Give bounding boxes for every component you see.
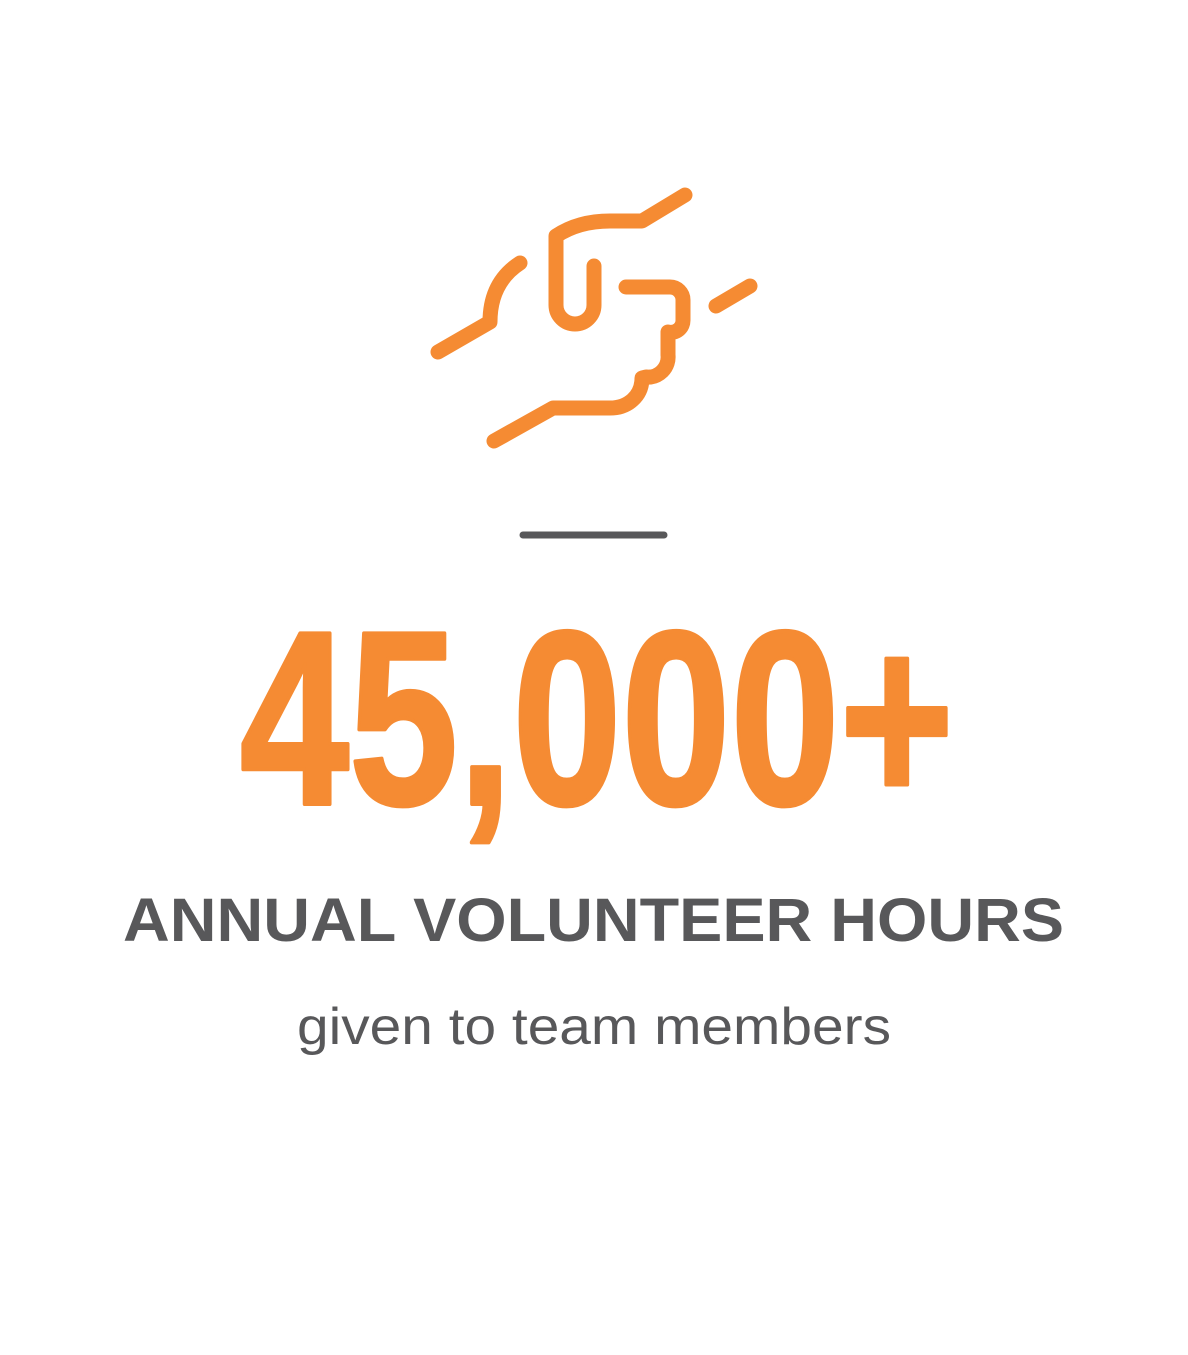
subtext: given to team members xyxy=(297,998,891,1056)
big number: 45,000+ xyxy=(240,579,954,857)
icon: handshake fist bump xyxy=(438,195,750,441)
heading: annual volunteer hours: ANNUAL VOLUNTEER HOURS xyxy=(123,886,1064,954)
divider xyxy=(523,532,664,538)
